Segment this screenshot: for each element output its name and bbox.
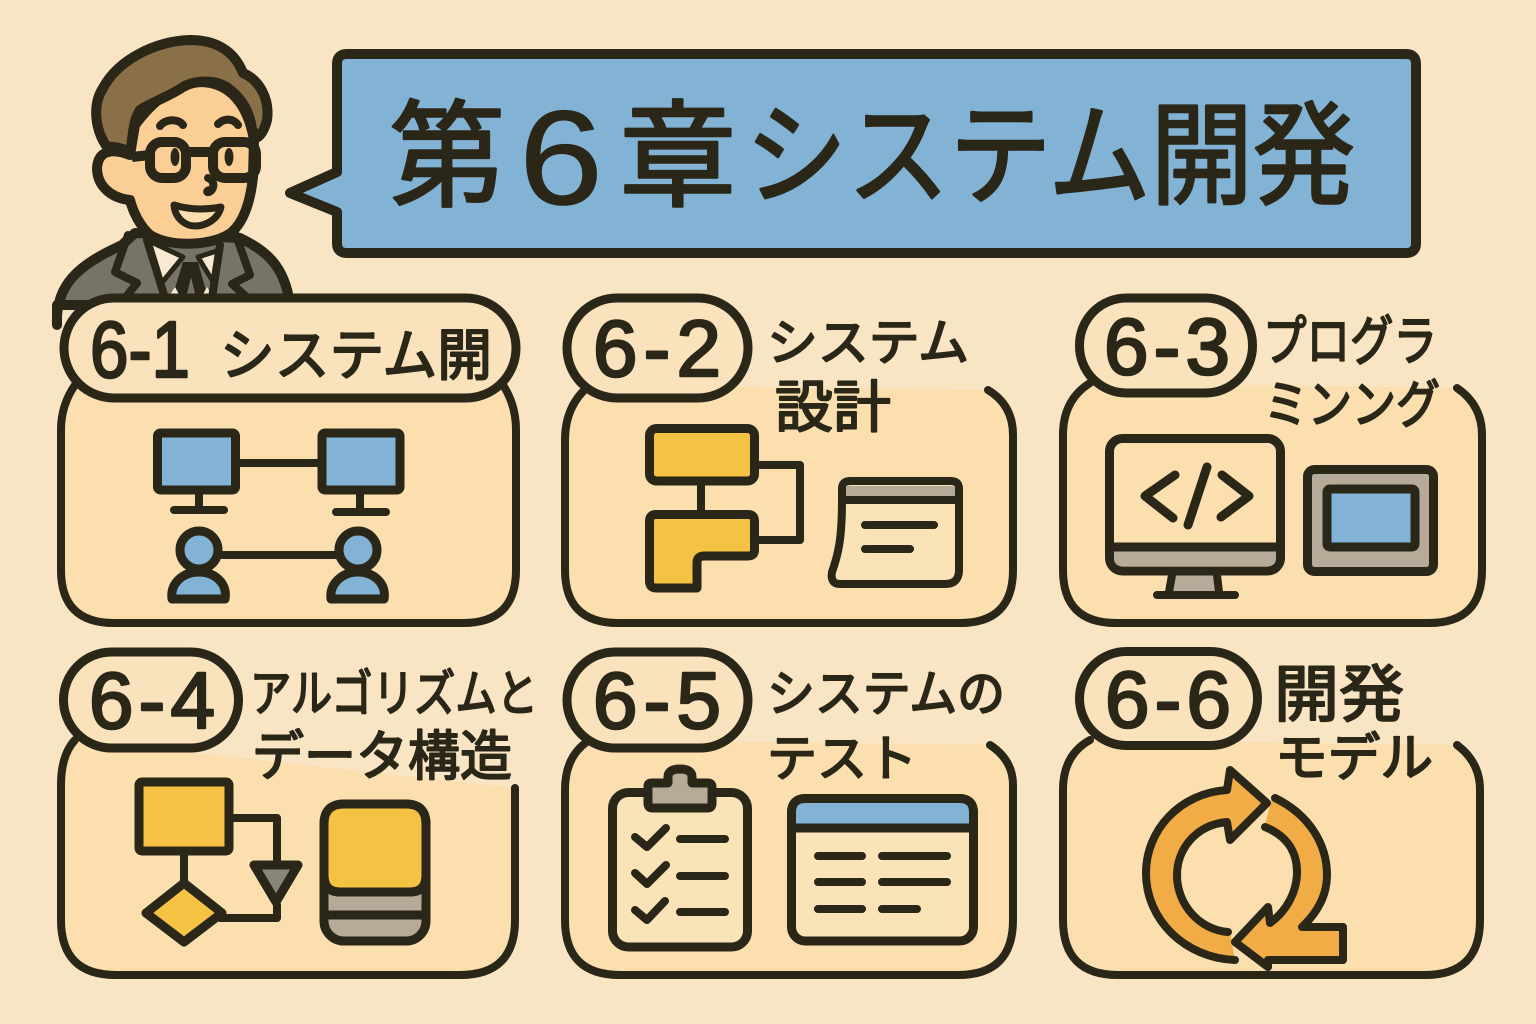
heading pill 6-3: 6-3 [1104,302,1230,391]
hair [96,40,268,152]
panel title 6-3: ミンング [1264,377,1440,435]
nose [207,178,213,192]
panel title 6-4 [250,666,538,787]
heading pill 6-1: 6-1 [90,305,190,394]
title: 章 [620,92,736,222]
eyes [170,148,234,166]
icon: networked computers and users [158,433,400,599]
bubble shape [290,54,1416,253]
heading pill 6-1 [64,298,516,398]
character: presenter in suit and glasses [57,40,290,325]
glasses [132,142,256,178]
panel title 6-5: テスト [767,731,917,787]
heading pill 6-4 [64,652,238,748]
panel title 6-2: 設計 [775,376,891,439]
title speech bubble [290,54,1416,253]
panel title 6-3 [1263,312,1440,435]
panel title 6-3: プログラ [1263,312,1437,372]
eyebrows [160,120,238,126]
icon: table window [792,798,974,941]
panel title 6-2: システム [767,315,969,371]
heading pill 6-3 [1080,298,1252,393]
heading pill 6-1: システム開 [220,324,492,387]
heading pill 6-6: 6-6 [1105,655,1231,744]
icon: flowchart and document [650,428,959,588]
face [97,82,254,244]
panel 6-1: system development [61,298,516,623]
icon: cycle arrows [1146,770,1343,967]
heading pill 6-4: 6-4 [89,656,215,745]
shirt and tie [147,240,220,298]
panel 6-2: system design [565,298,1013,623]
title: システム開発 [745,94,1355,219]
panel 6-4: algorithms and data structures [61,652,538,975]
panel title 6-5 [767,666,1005,787]
title [389,84,1355,233]
icon: checklist clipboard [612,769,748,947]
heading pill 6-5: 6-5 [593,656,721,745]
title: 第 [389,92,505,222]
panel title 6-6: モデル [1275,730,1433,788]
title: 6 [519,84,603,233]
panel title 6-5: システムの [767,666,1005,722]
panel 6-6: development models [1063,652,1480,975]
heading pill 6-2 [567,298,748,398]
heading pill 6-6 [1080,652,1258,746]
panel title 6-6: 開発 [1274,661,1404,730]
mouth [174,205,221,226]
icon: flowchart and data stack [139,782,426,942]
heading pill 6-2: 6-2 [593,304,721,393]
panel title 6-4: アルゴリズムと [250,666,538,722]
panel 6-5: system testing [565,652,1013,975]
panel 6-3: programming [1063,298,1482,623]
panel title 6-4: データ構造 [252,727,512,787]
panel title 6-2 [767,315,969,439]
lapels [115,235,250,298]
icon: code monitor and tablet [1110,438,1434,595]
suit [57,233,290,325]
panel title 6-6 [1274,661,1433,788]
heading pill 6-5 [567,652,748,748]
